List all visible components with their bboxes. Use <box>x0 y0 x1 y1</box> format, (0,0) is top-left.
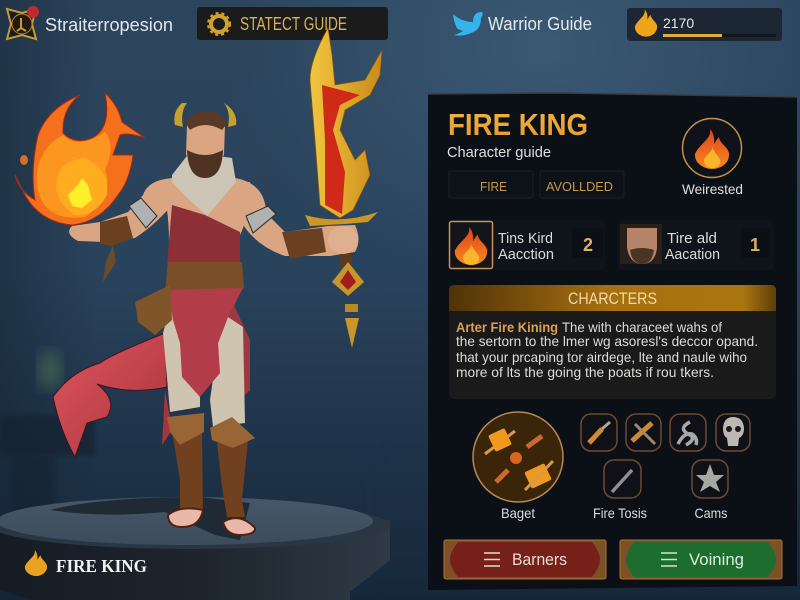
stone platform <box>0 497 390 600</box>
tag: fire <box>449 171 533 198</box>
body text: Arter Fire Kining <box>456 319 558 335</box>
top nav: strategy guide tab <box>197 7 388 40</box>
portrait <box>620 224 662 264</box>
badge: baget: Baget <box>501 505 535 521</box>
body text <box>456 319 758 380</box>
button: voining: Voining <box>689 550 744 569</box>
body text: more of lts the going the poats if rou tkers. <box>456 364 714 380</box>
score number: 2170 <box>663 15 694 31</box>
cape <box>53 333 167 457</box>
tag: avollded <box>540 171 624 198</box>
button: voining <box>620 540 782 579</box>
body text: the sertorn to the lmer wg asoresl's deccor opand. <box>456 333 758 349</box>
belt <box>165 262 244 292</box>
top nav: warrior guide <box>453 12 592 36</box>
panel: charcters description <box>449 285 776 399</box>
site title: Straiterropesion <box>45 15 173 35</box>
scarf <box>172 152 236 216</box>
subheading: Character guide <box>447 144 551 161</box>
torso <box>160 180 250 265</box>
tag: fire: FIRE <box>480 179 507 194</box>
card: tins kird: Tins Kird <box>498 230 553 247</box>
panel: character guide <box>428 93 797 590</box>
icon: flame <box>25 550 47 576</box>
trousers <box>163 300 245 427</box>
button: barners <box>444 540 606 579</box>
tool: fire tosis: Fire Tosis <box>593 505 647 521</box>
red tunic <box>167 205 240 265</box>
badge: baget <box>473 412 563 521</box>
icon: gear <box>208 13 230 35</box>
tool: cams: Cams <box>694 505 728 521</box>
red apron <box>168 288 243 397</box>
icon: flame <box>635 9 657 37</box>
icon: blue bird <box>453 12 483 36</box>
section header <box>449 285 776 311</box>
boots <box>167 413 255 535</box>
tool: cams <box>692 460 728 521</box>
pouch <box>135 285 172 335</box>
head <box>174 103 236 178</box>
fireball <box>15 93 145 225</box>
progress bar <box>663 34 776 37</box>
card: tire ald: Tire ald <box>667 230 717 247</box>
tab label: STATECT GUIDE <box>240 14 347 34</box>
top nav: logo and title <box>7 6 173 39</box>
card: tins kird: 2 <box>583 235 593 255</box>
icon: skull <box>716 414 750 451</box>
arms <box>69 178 358 256</box>
section header: CHARCTERS <box>568 289 657 308</box>
card: tire ald: Aacation <box>665 246 720 263</box>
bottom-left name badge <box>25 550 147 576</box>
nav label: Warrior Guide <box>488 14 592 34</box>
character: fire king <box>53 103 358 535</box>
card: tins kird: Aacction <box>498 246 554 263</box>
card: tire ald <box>618 220 774 270</box>
body text: that your prcaping tor airdege, lte and naule wiho <box>456 349 747 365</box>
tool: fire tosis <box>593 460 647 521</box>
name label: FIRE KING <box>56 556 147 576</box>
button: barners: Barners <box>512 550 567 569</box>
bracers <box>100 198 326 282</box>
back cloth <box>225 290 250 400</box>
icon: gold crest logo <box>7 6 39 39</box>
card: tire ald: 1 <box>750 235 760 255</box>
flaming sword <box>305 28 382 348</box>
score box <box>627 8 782 41</box>
icon: crossed tools <box>626 414 661 451</box>
icon: silver knot <box>670 414 706 451</box>
emblem: flame medallion <box>682 118 743 197</box>
emblem: flame medallion: Weirested <box>682 181 743 197</box>
heading: FIRE KING <box>448 107 588 142</box>
icon: torch <box>581 414 617 451</box>
card: tins kird <box>449 220 605 270</box>
tag: avollded: AVOLLDED <box>546 179 613 194</box>
body text: The with characeet wahs of <box>562 319 722 335</box>
